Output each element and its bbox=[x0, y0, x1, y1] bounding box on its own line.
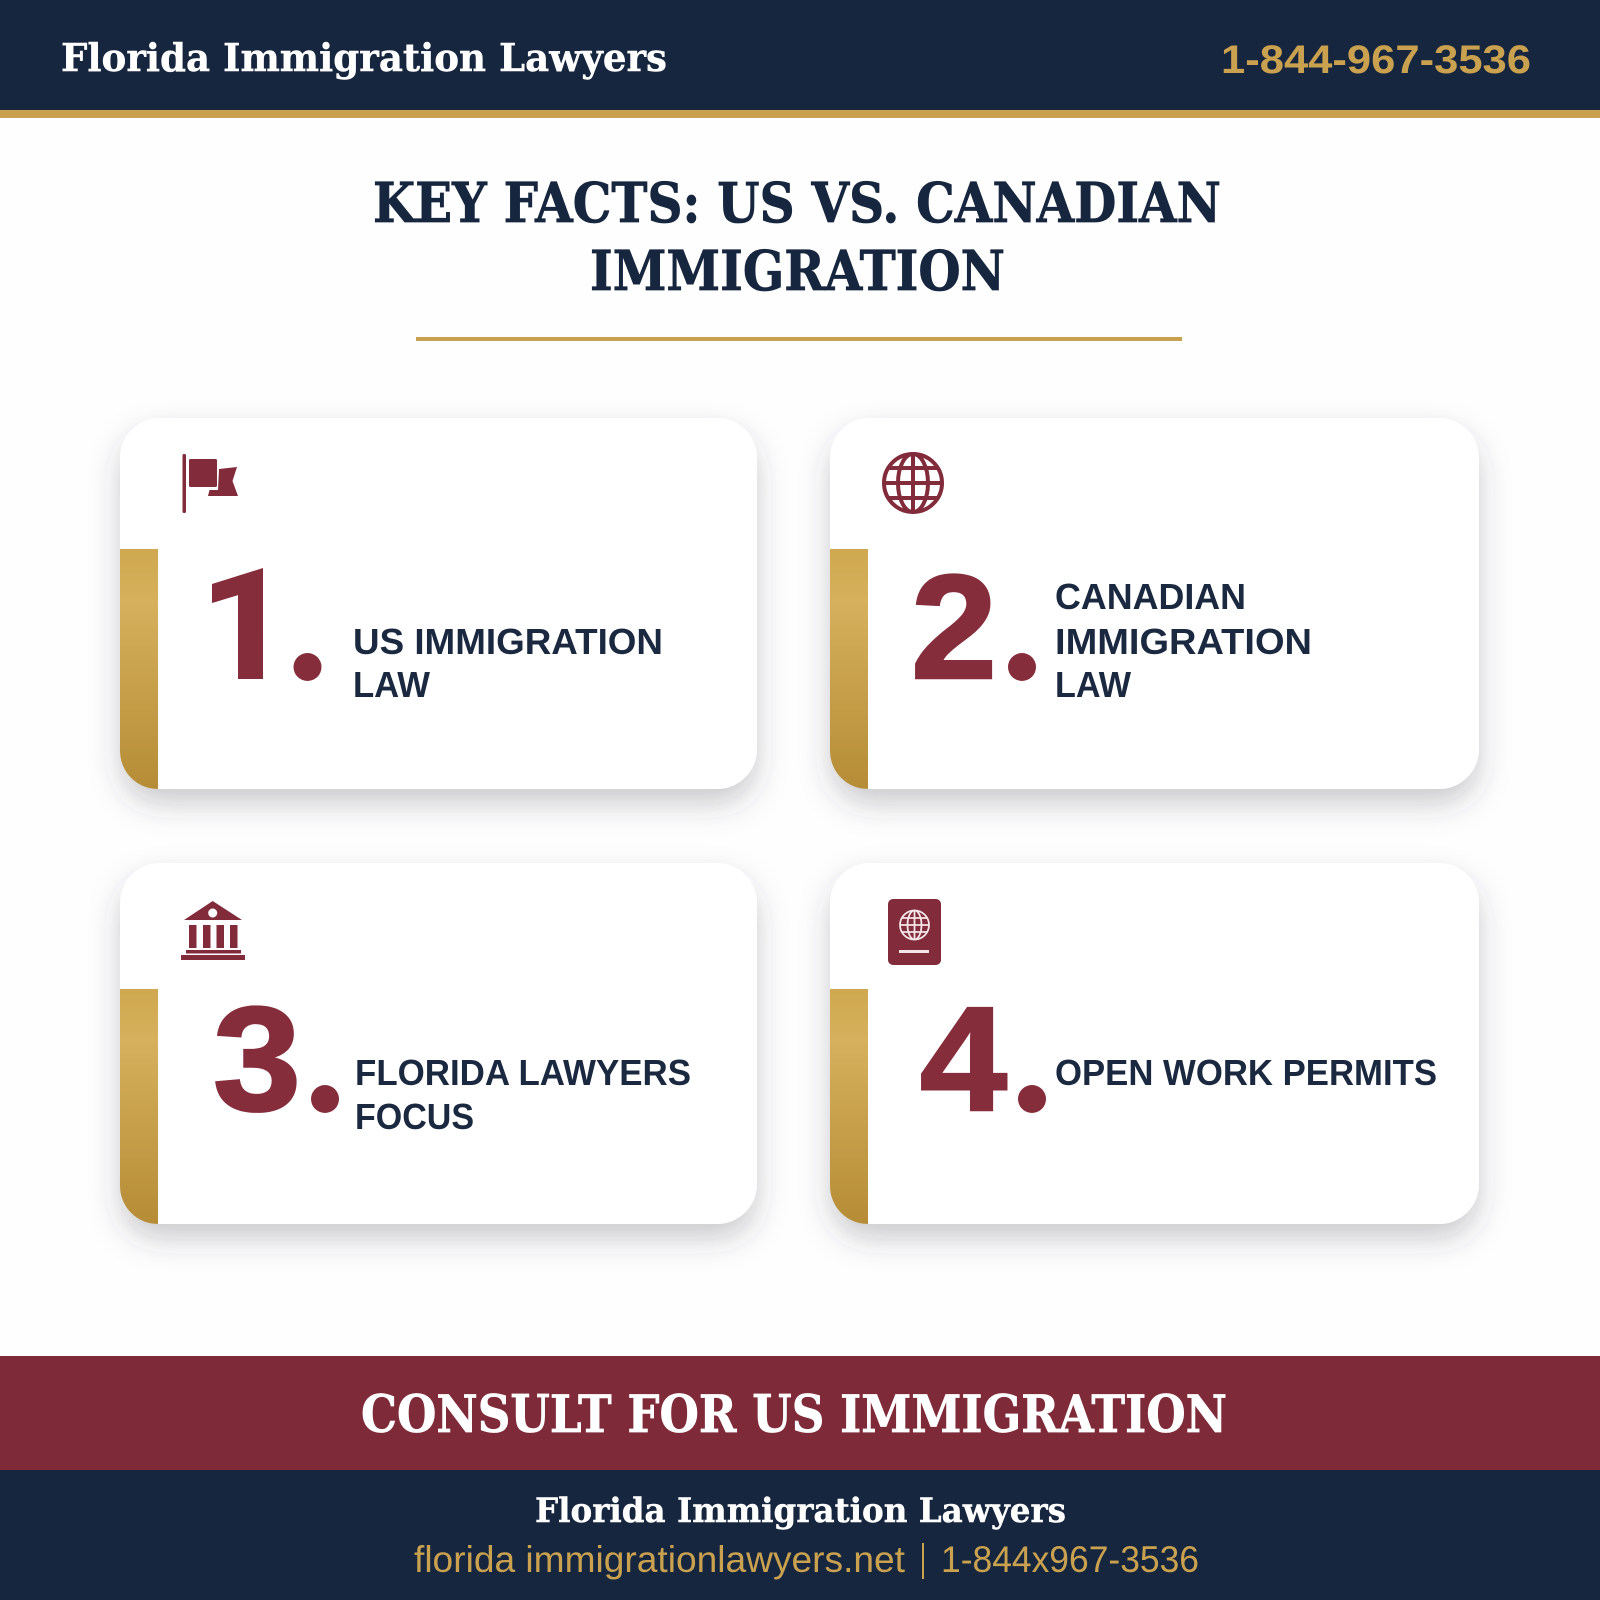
footer firm name: Florida Immigration Lawyers bbox=[535, 1491, 1066, 1531]
panel: card 4 open work permits bbox=[830, 863, 1479, 1224]
label: FLORIDA LAWYERS bbox=[355, 1052, 691, 1093]
footer contact line: 1-844x967-3536 bbox=[941, 1539, 1199, 1580]
call to action band bbox=[0, 1356, 1600, 1471]
number 1: 1 bbox=[205, 545, 287, 710]
icon: flag bbox=[182, 454, 238, 513]
label bbox=[353, 621, 663, 705]
footer bbox=[0, 1470, 1600, 1600]
label: LAW bbox=[353, 664, 430, 705]
footer contact line bbox=[414, 1539, 1199, 1580]
label: FOCUS bbox=[355, 1096, 474, 1137]
title: IMMIGRATION bbox=[590, 238, 1005, 303]
label bbox=[355, 1052, 691, 1137]
header bar bbox=[0, 0, 1600, 118]
label: IMMIGRATION bbox=[1055, 621, 1312, 662]
number 1 bbox=[212, 568, 322, 681]
number 2: 2 bbox=[911, 545, 997, 710]
label: LAW bbox=[1055, 664, 1131, 705]
icon: globe bbox=[884, 454, 942, 512]
number 3 bbox=[213, 977, 339, 1142]
icon: passport bbox=[888, 899, 941, 965]
footer contact line: florida immigrationlawyers.net bbox=[414, 1539, 906, 1580]
label: OPEN WORK PERMITS bbox=[1055, 1052, 1437, 1093]
number 4: 4 bbox=[920, 977, 1007, 1142]
header firm name: Florida Immigration Lawyers bbox=[61, 35, 667, 80]
panel: card 2 Canadian immigration law bbox=[830, 418, 1479, 789]
title bbox=[373, 170, 1221, 303]
number 4 bbox=[920, 977, 1046, 1142]
call to action band: CONSULT FOR US IMMIGRATION bbox=[361, 1385, 1227, 1445]
panel: card 1 US immigration law bbox=[120, 418, 757, 789]
number 2 bbox=[911, 545, 1036, 710]
label: CANADIAN bbox=[1055, 576, 1246, 617]
panel: card 3 Florida lawyers focus bbox=[120, 863, 757, 1224]
label: US IMMIGRATION bbox=[353, 621, 663, 662]
label bbox=[1055, 576, 1312, 705]
icon: courthouse bbox=[181, 901, 245, 960]
header phone number: 1-844-967-3536 bbox=[1221, 38, 1531, 82]
number 3: 3 bbox=[213, 977, 301, 1142]
title: KEY FACTS: US VS. CANADIAN bbox=[373, 170, 1221, 235]
